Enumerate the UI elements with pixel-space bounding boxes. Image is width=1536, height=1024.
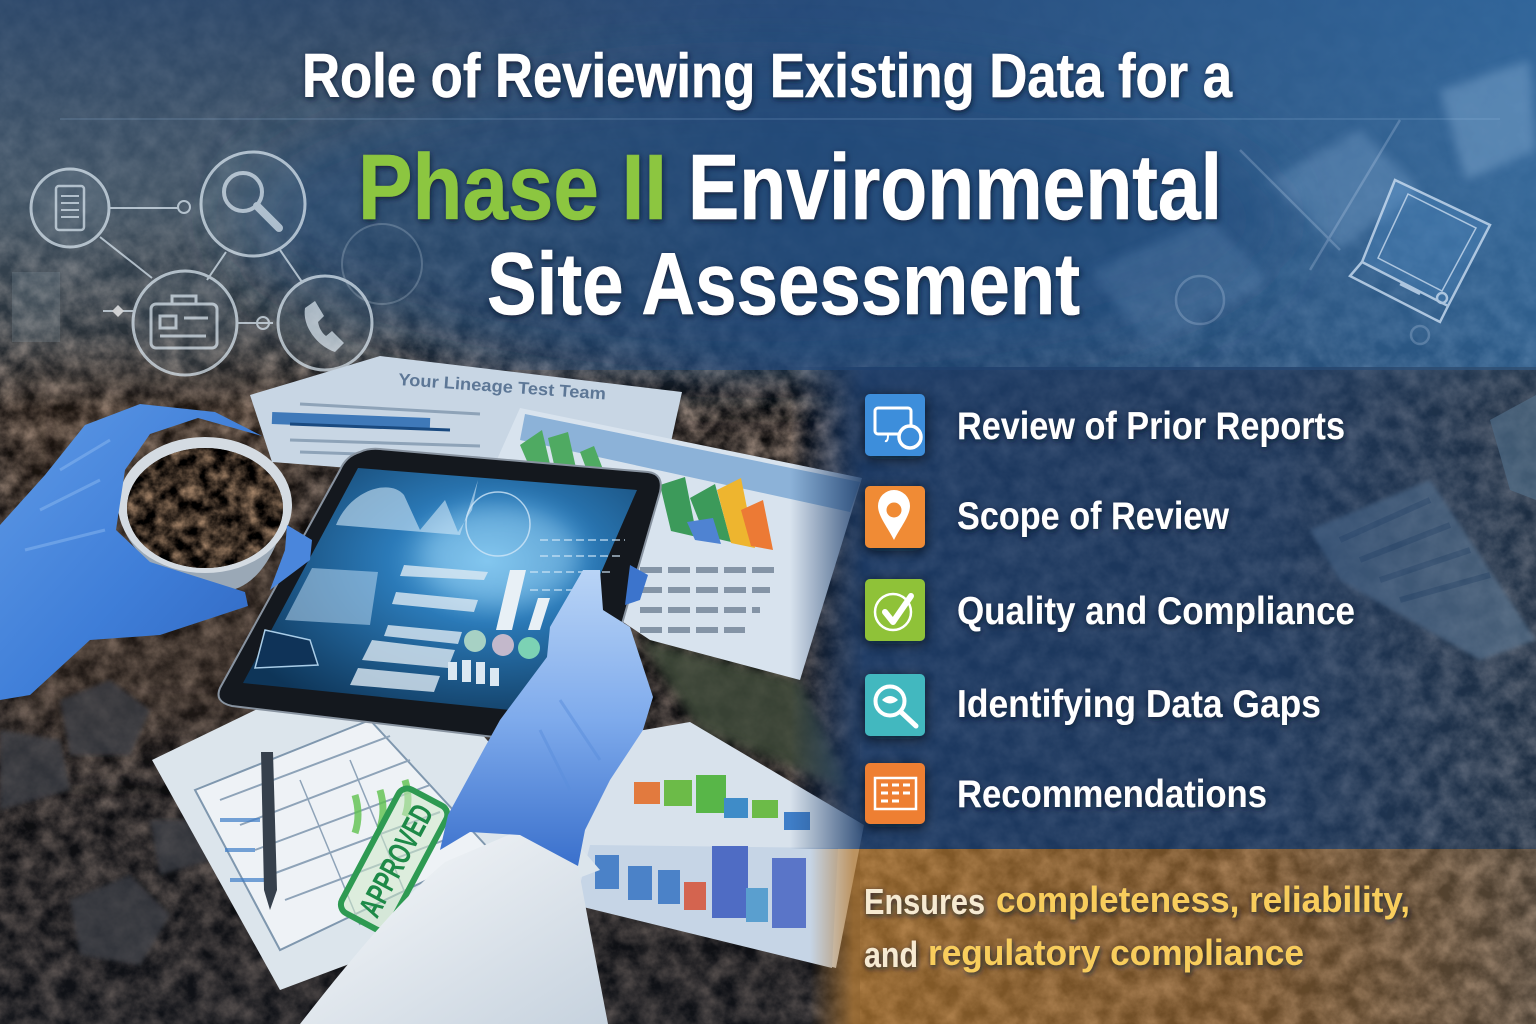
paper: top report	[250, 356, 682, 492]
glove: right hand on tablet	[440, 565, 653, 866]
list item: Identifying Data Gaps: Identifying Data Gaps	[957, 683, 1321, 726]
container of soil held in left hand	[118, 437, 292, 592]
icon: monitor review	[865, 394, 925, 456]
panel: conclusion band	[810, 849, 1536, 1024]
paper: bar chart report	[470, 408, 862, 680]
list item: Quality and Compliance: Quality and Compliance	[957, 590, 1355, 633]
icon: phone	[278, 276, 372, 370]
icon: map pin	[865, 486, 925, 548]
paper: approved form	[152, 640, 600, 990]
glove: left hand holding sample	[0, 404, 312, 700]
icon: device sketch, upper right	[1176, 120, 1490, 344]
list item: Scope of Review: Scope of Review	[957, 495, 1230, 538]
network connectors	[100, 201, 422, 329]
icon: magnifier	[865, 674, 925, 736]
tablet area chart	[285, 568, 378, 625]
title line 2: Environmental	[688, 135, 1222, 239]
list item: Recommendations	[865, 763, 1267, 824]
list item: Identifying Data Gaps	[865, 674, 1321, 736]
faded technical sketches upper right	[1090, 60, 1536, 350]
stamp: approved	[337, 785, 451, 934]
tablet pies	[464, 630, 540, 659]
tablet dial	[466, 492, 530, 556]
icon: tablet document	[31, 169, 109, 247]
icon: checklist calendar	[865, 763, 925, 824]
tablet small bars	[448, 660, 499, 686]
icon: check mark	[865, 579, 925, 641]
stamp: approved: APPROVED	[351, 798, 440, 923]
tablet	[218, 449, 661, 747]
tablet list rows	[350, 565, 488, 692]
soil and foliage patch between papers	[640, 640, 850, 790]
paper: top report: Your Lineage Test Team	[398, 370, 607, 403]
conclusion text line 1: completeness, reliability,	[996, 879, 1410, 920]
pen	[261, 752, 277, 910]
horizontal title rule	[60, 118, 1500, 120]
conclusion text line 2: and	[864, 934, 918, 975]
list item: Recommendations: Recommendations	[957, 773, 1267, 816]
icon network: upper left	[12, 152, 422, 375]
coat sleeve	[300, 830, 608, 1024]
faded paper: far right	[1310, 395, 1536, 660]
title line 1: Role of Reviewing Existing Data for a	[302, 42, 1232, 111]
title	[302, 42, 1232, 333]
title line 2	[358, 135, 1222, 239]
icon: briefcase	[133, 271, 237, 375]
list item: Review of Prior Reports	[865, 394, 1345, 456]
list item: Quality and Compliance	[865, 579, 1355, 641]
title line 3: Site Assessment	[487, 234, 1080, 333]
title line 2: Phase II	[358, 135, 667, 239]
tablet line chart	[336, 480, 478, 535]
paper: lower chart report	[470, 722, 864, 968]
tablet map	[255, 630, 318, 668]
conclusion text line 1: Ensures	[864, 881, 985, 922]
tablet bars	[496, 570, 550, 630]
icon: magnifier	[201, 152, 305, 256]
conclusion text line 2: regulatory compliance	[928, 932, 1304, 973]
list item: Review of Prior Reports: Review of Prior Reports	[957, 405, 1345, 448]
panel: five-item list	[790, 367, 1536, 849]
list item: Scope of Review	[865, 486, 1230, 548]
